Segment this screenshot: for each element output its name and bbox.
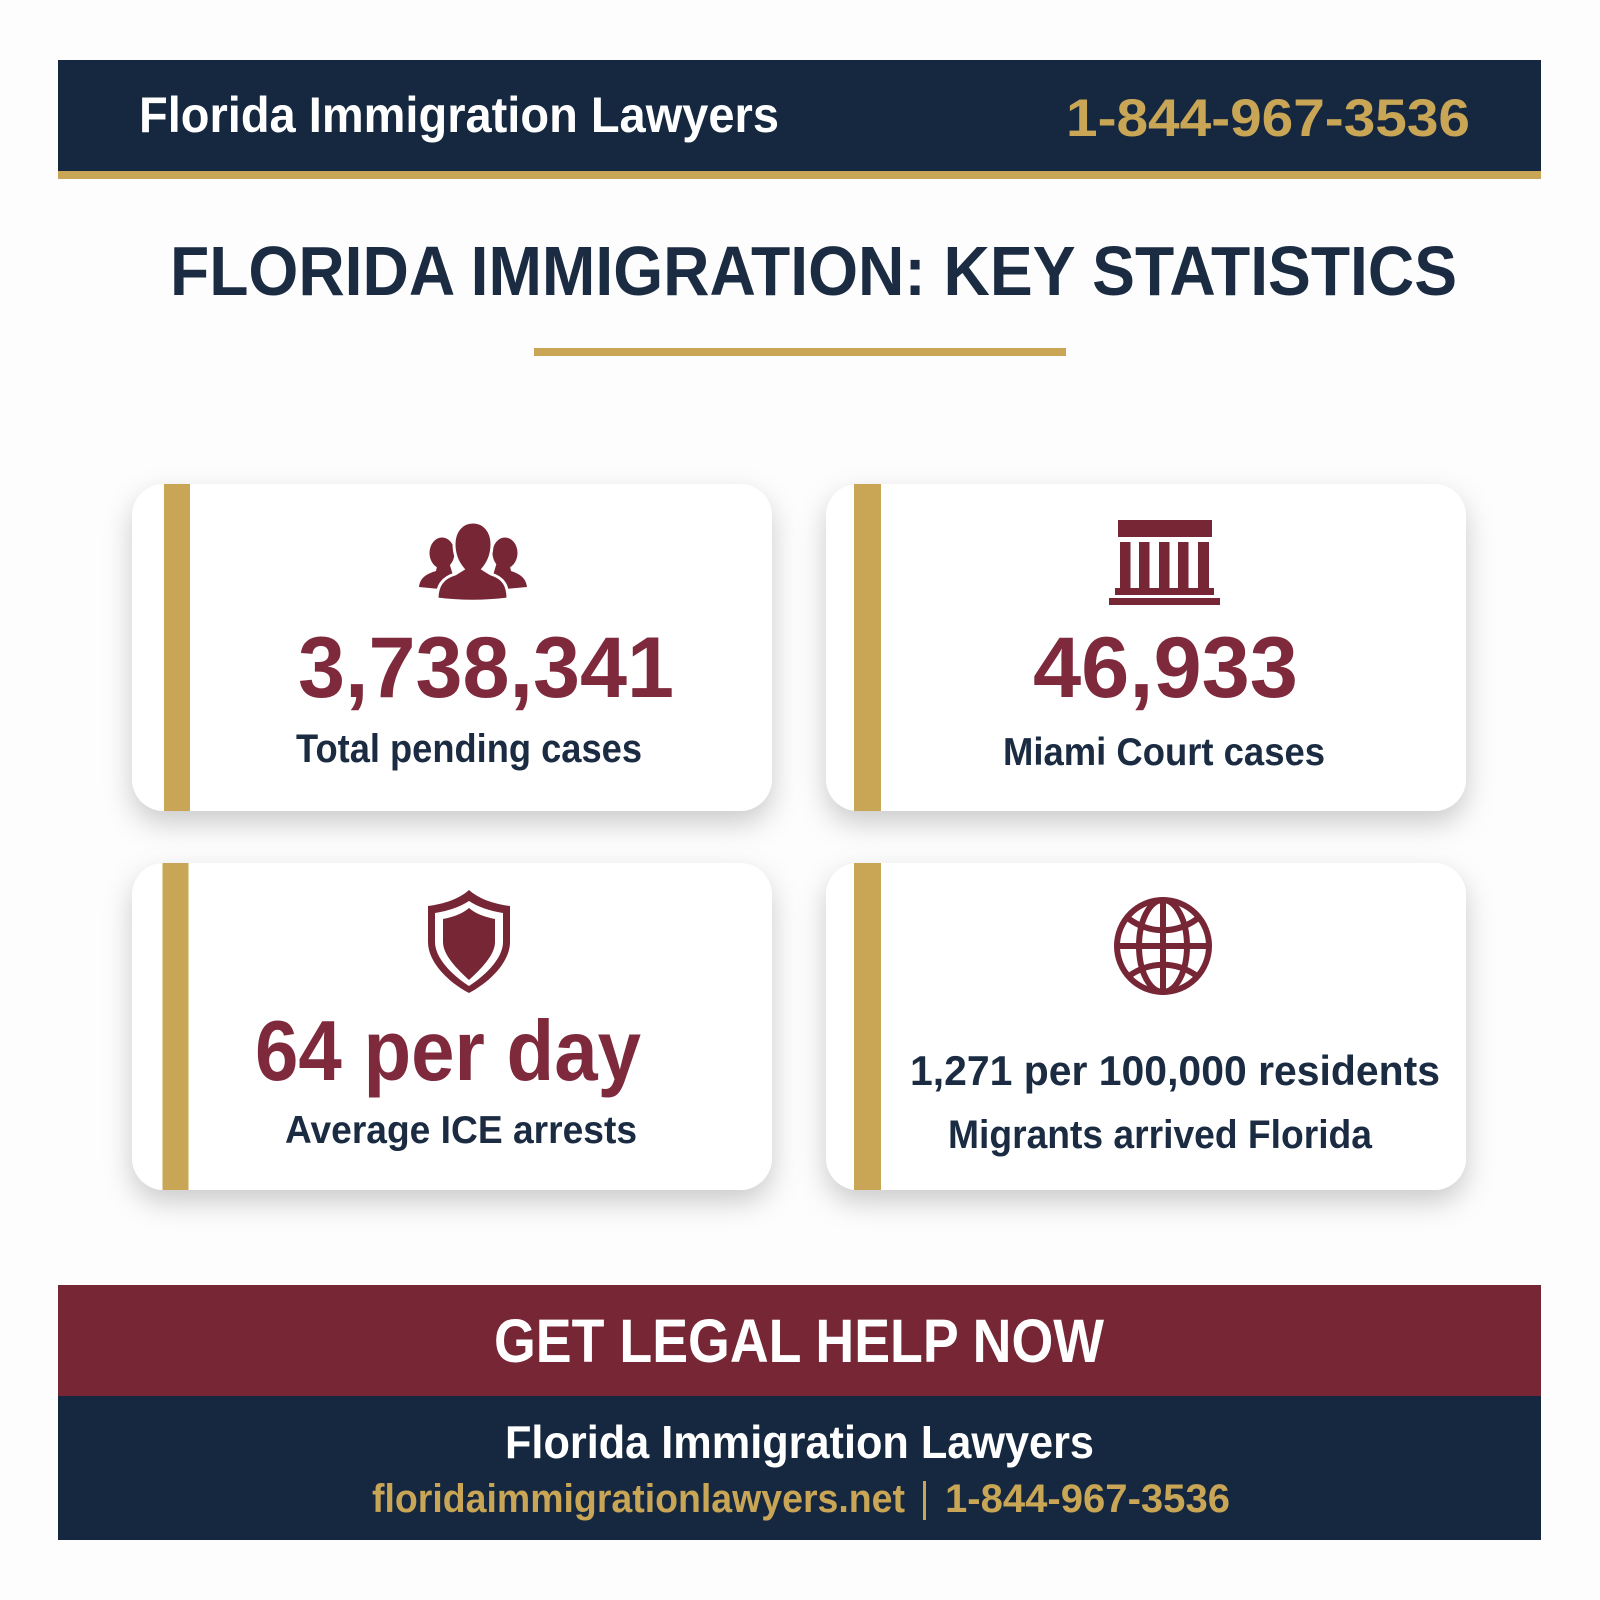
stat number: 46,933 — [1033, 620, 1298, 716]
call to action heading: GET LEGAL HELP NOW — [494, 1307, 1104, 1375]
icon: globe — [1117, 900, 1209, 992]
icon: shield — [428, 890, 510, 993]
stat value: 1,271 per 100,000 residents — [910, 1047, 1440, 1094]
stat label: Average ICE arrests — [285, 1109, 637, 1152]
stat label: Total pending cases — [296, 727, 642, 771]
stat label: Migrants arrived Florida — [948, 1113, 1373, 1157]
header banner — [58, 60, 1541, 179]
stat number: 3,738,341 — [298, 620, 674, 716]
header phone number: 1-844-967-3536 — [1066, 89, 1470, 148]
footer contact panel — [58, 1396, 1541, 1540]
title underline — [534, 348, 1066, 356]
panel: average ICE arrests — [132, 863, 772, 1190]
footer website: floridaimmigrationlawyers.net — [372, 1477, 905, 1521]
panel: Miami Court cases — [826, 484, 1466, 811]
icon: group of people — [419, 522, 527, 601]
icon: courthouse columns — [1109, 520, 1220, 605]
footer firm name: Florida Immigration Lawyers — [505, 1416, 1094, 1468]
stat label: Miami Court cases — [1003, 731, 1325, 774]
panel: migrants arrived Florida — [826, 863, 1466, 1190]
title: FLORIDA IMMIGRATION: KEY STATISTICS — [170, 232, 1457, 310]
panel: total pending cases — [132, 484, 772, 811]
header firm name: Florida Immigration Lawyers — [139, 87, 779, 143]
call to action banner — [58, 1285, 1541, 1396]
stat number: 64 per day — [255, 1004, 641, 1099]
footer phone number: 1-844-967-3536 — [945, 1477, 1230, 1521]
